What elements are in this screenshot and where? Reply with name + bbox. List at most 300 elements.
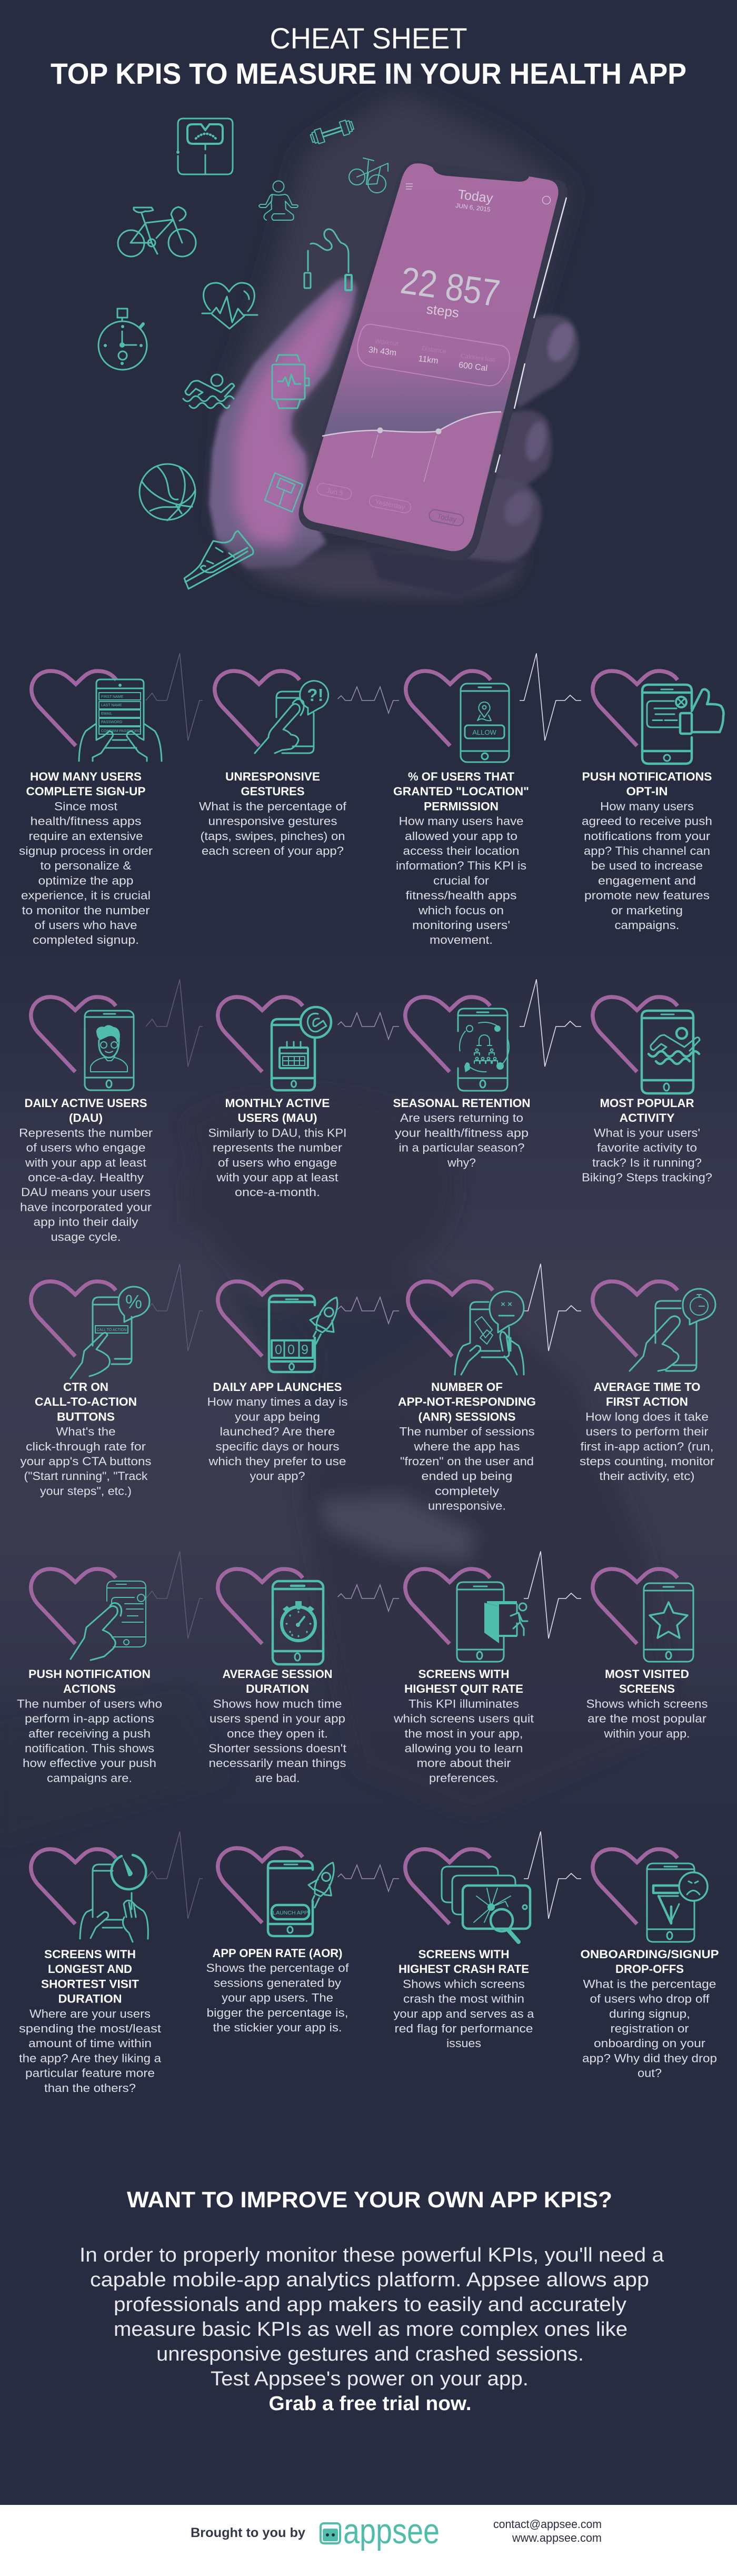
screen labels: Today (457, 187, 494, 206)
body text: your app's CTA buttons (20, 1455, 152, 1468)
body text: of users who engage (26, 1141, 145, 1154)
panel: average session duration: DURATION (246, 1682, 309, 1695)
ecg lines row 2 (146, 980, 581, 1067)
body text: allowing you to learn (404, 1742, 523, 1755)
icon: phone with rocket and counter: 0 (287, 1343, 295, 1357)
icon: signup form on tablet: EMAIL (101, 712, 112, 716)
body text: your health/fitness app (395, 1126, 529, 1139)
icon: phone with star (644, 1583, 693, 1662)
body text: Shows how much time (213, 1697, 342, 1710)
body text: crucial for (433, 874, 489, 887)
heading: PUSH NOTIFICATION (28, 1667, 151, 1681)
body text: What's the (56, 1425, 116, 1438)
body text (395, 1111, 529, 1169)
body text: require an extensive (28, 830, 143, 843)
heading: DAILY APP LAUNCHES (213, 1380, 342, 1394)
panel: ctr on call-to-action buttons: BUTTONS (57, 1410, 115, 1423)
ecg lines row 4 (146, 1552, 581, 1639)
icon: phone with rocket and counter (269, 1291, 348, 1372)
panel: unresponsive gestures: GESTURES (241, 785, 304, 798)
heart outline (31, 997, 116, 1072)
body text: experience, it is crucial (21, 889, 151, 902)
icon: heart pulse (202, 283, 257, 329)
icon: phone with rocket and counter: 0 (275, 1343, 282, 1357)
icon: frozen phone in hands (455, 1291, 524, 1375)
body text: which screens users quit (393, 1712, 534, 1725)
body text: (taps, swipes, pinches) on (200, 830, 345, 843)
brought to you by: Brought to you by (191, 2525, 305, 2540)
body text: once-a-day. Healthy (28, 1171, 144, 1184)
body text: track? Is it running? (592, 1156, 702, 1169)
body text: first in-app action? (run, (580, 1440, 714, 1453)
title: cheat sheet: CHEAT SHEET (270, 22, 467, 55)
body text (399, 1425, 535, 1513)
body text: which focus on (418, 904, 504, 917)
body text: be used to increase (591, 859, 703, 872)
chart area (303, 412, 503, 551)
body text: allowed your app to (405, 830, 517, 843)
panel: app-not-responding sessions: (ANR) SESSIONS (418, 1410, 516, 1423)
body text: after receiving a push (28, 1727, 151, 1740)
heading: SEASONAL RETENTION (393, 1097, 531, 1110)
heading: APP OPEN RATE (AOR) (213, 1947, 342, 1960)
body text (208, 1697, 346, 1784)
body text: are bad. (255, 1771, 300, 1784)
icon: frozen phone in hands: × × (501, 1300, 512, 1309)
body text: how effective your push (23, 1756, 156, 1770)
panel: app open rate (206, 1848, 349, 2034)
stats pill (357, 324, 510, 386)
body text: once-a-month. (235, 1186, 320, 1199)
heart outline (406, 671, 491, 746)
panel: push notification actions: ACTIONS (63, 1682, 116, 1695)
panel: average session duration (208, 1569, 346, 1784)
icon: signup form on tablet: LAST NAME (101, 704, 122, 707)
panel: screens with highest quit rate: HIGHEST QUIT RATE (404, 1682, 523, 1695)
panel: push notifications opt-in: OPT-IN (626, 785, 668, 798)
icon: phone with funnel and sad face (647, 1863, 708, 1942)
body text (396, 815, 526, 946)
body text: notification. This shows (25, 1742, 154, 1755)
icon: swimmer (183, 374, 234, 408)
body text: perform in-app actions (25, 1712, 154, 1725)
panel: location permission: GRANTED "LOCATION" (393, 785, 529, 798)
body text: campaigns. (615, 919, 679, 932)
panel: how many users complete sign-up: COMPLETE SIGN-UP (26, 785, 145, 798)
body text: completed signup. (33, 933, 139, 946)
call to action text: Test Appsee's power on your app. (211, 2368, 529, 2390)
body text: The number of sessions (399, 1425, 535, 1438)
icon: tap call to action: CALL TO ACTION (97, 1328, 126, 1332)
icon: phone with stopwatch (273, 1581, 323, 1664)
panel: monthly active users (208, 997, 346, 1199)
heart outline (218, 1281, 303, 1356)
heading: AVERAGE SESSION (222, 1667, 333, 1681)
panel: onboarding signup drop-offs: DROP-OFFS (615, 1962, 684, 1976)
contact details (493, 2518, 602, 2544)
body text: with your app at least (25, 1156, 146, 1169)
body text (19, 800, 153, 946)
body text (19, 1126, 153, 1243)
panel: daily active users: (DAU) (69, 1111, 103, 1124)
heading: MONTHLY ACTIVE (225, 1097, 330, 1110)
footer band (0, 2505, 737, 2576)
panel: screens with longest and shortest visit duration: DURATION (58, 1992, 122, 2006)
call to action heading: WANT TO IMPROVE YOUR OWN APP KPIS? (127, 2187, 612, 2213)
body text: their activity, etc) (599, 1469, 695, 1483)
body text: users spend in your app (210, 1712, 345, 1725)
body text: to personalize & (40, 859, 132, 872)
body text (19, 2007, 162, 2095)
icon: phone with exit door (457, 1582, 527, 1662)
heading: UNRESPONSIVE (225, 770, 320, 783)
panel: screens with highest crash rate: HIGHEST CRASH RATE (399, 1962, 529, 1976)
body text: crash the most within (403, 1992, 524, 2006)
panel: how many users complete sign-up (19, 671, 162, 946)
panel: average time to first action (580, 1281, 715, 1483)
body text: registration or (611, 2022, 689, 2035)
body text: during signup, (609, 2007, 690, 2020)
panel: push notification actions (17, 1569, 162, 1784)
screen labels: JUN 6, 2015 (455, 202, 491, 213)
body text: monitoring users' (412, 919, 510, 932)
body text: health/fitness apps (31, 815, 141, 828)
icon: large bicycle (118, 207, 196, 256)
panel: location permission: PERMISSION (424, 800, 499, 813)
body text: Shows which screens (586, 1697, 708, 1710)
icon: signup form on tablet (79, 679, 162, 761)
body text (208, 1126, 346, 1199)
icon: phone with allow button: ALLOW (472, 728, 496, 736)
panel: screens with longest and shortest visit duration: SHORTEST VISIT (41, 1977, 140, 1990)
panel: app-not-responding sessions (398, 1281, 536, 1513)
body text: agreed to receive push (582, 815, 712, 828)
body text: unresponsive. (428, 1499, 506, 1513)
icon: basketball (140, 464, 195, 520)
body text: or marketing (611, 904, 683, 917)
contact details: contact@appsee.com (493, 2518, 602, 2531)
heart outline (405, 1569, 490, 1644)
body text: represents the number (213, 1141, 342, 1154)
body text: users to perform their (585, 1425, 709, 1438)
heart outline (218, 997, 303, 1072)
body text: app? Why did they drop (582, 2051, 717, 2065)
body text: sessions generated by (214, 1976, 341, 1989)
heart outline (593, 1569, 678, 1644)
body text: What is your users' (594, 1126, 700, 1139)
hero: hand holding phone (209, 92, 579, 598)
panel: unresponsive gestures (199, 671, 347, 857)
panel: ctr on call-to-action buttons (20, 1281, 152, 1497)
body text: access their location (403, 844, 519, 857)
body text: the stickier your app is. (213, 2021, 342, 2034)
icon: phone with swimmer (642, 1011, 700, 1093)
body text: necessarily mean things (208, 1756, 346, 1770)
body text (582, 1977, 717, 2080)
panel: onboarding signup drop-offs (580, 1849, 719, 2080)
panel: push notifications opt-in (582, 671, 723, 932)
screen labels: 22 857 (398, 259, 502, 315)
body text: of users who drop off (590, 1992, 710, 2006)
icon: tap with question bubble: ?! (307, 685, 324, 705)
body text: are the most popular (587, 1712, 706, 1725)
body text (20, 1425, 152, 1497)
icon: dumbbell (310, 119, 355, 145)
body text: to monitor the number (22, 904, 150, 917)
appsee logo (321, 2511, 440, 2551)
body text: with your app at least (216, 1171, 338, 1184)
palm and thumb (209, 279, 357, 569)
body text: movement. (430, 933, 493, 946)
icon: phone with rocket and launch button: LAUNCH APP (273, 1910, 308, 1916)
body text (207, 1395, 347, 1483)
stats pill: 11km (418, 354, 439, 366)
heading: ONBOARDING/SIGNUP (580, 1948, 719, 1961)
icon: signup form on tablet: PASSWORD (101, 721, 122, 724)
stats pill: 600 Cal (458, 361, 488, 373)
icon: small bicycle (349, 158, 388, 193)
icon: signup form on tablet: FIRST NAME (101, 695, 124, 699)
body text: app? This channel can (584, 844, 710, 857)
body text: How many times a day is (207, 1395, 347, 1408)
body text: fitness/health apps (405, 889, 517, 902)
panel: location permission (393, 671, 529, 946)
icon: tap with question bubble (255, 681, 328, 753)
body text: ended up being (421, 1469, 513, 1483)
ecg lines row 3 (146, 1264, 581, 1351)
body text: red flag for performance (395, 2022, 533, 2035)
light beam behind phone (221, 92, 569, 527)
screen labels (398, 187, 502, 321)
appsee logo: appsee (343, 2511, 440, 2551)
body text: your app? (250, 1469, 305, 1483)
panel: app-not-responding sessions: APP-NOT-RESPONDING (398, 1395, 536, 1408)
call to action text: measure basic KPIs as well as more complex ones like (114, 2318, 628, 2341)
chart line and markers (322, 412, 501, 482)
body text: Are users returning to (400, 1111, 523, 1124)
icon: jump rope (304, 229, 352, 290)
heart outline (218, 1848, 303, 1923)
panel: screens with highest crash rate (394, 1849, 534, 2050)
body text: How many users (600, 800, 694, 813)
heading: HOW MANY USERS (30, 770, 142, 783)
heart outline (408, 1281, 493, 1356)
fingers (368, 315, 579, 596)
body text: "frozen" on the user and (400, 1455, 534, 1468)
body text: engagement and (598, 874, 696, 887)
heading: MOST POPULAR (600, 1097, 694, 1110)
icon: phone with rocket and counter: 9 (301, 1343, 308, 1357)
icon: smart watch (272, 355, 309, 408)
heading: DAILY ACTIVE USERS (24, 1097, 147, 1110)
body text: unresponsive gestures (208, 815, 337, 828)
body text: What is the percentage (583, 1977, 716, 1990)
body text: Since most (54, 800, 117, 813)
heart outline (218, 1569, 303, 1644)
body text: signup process in order (19, 844, 153, 857)
body text: of users who have (35, 919, 137, 932)
body text: onboarding on your (594, 2037, 705, 2050)
body text (206, 1961, 349, 2034)
body text: promote new features (584, 889, 710, 902)
body text: completely (435, 1484, 499, 1497)
body text: What is the percentage of (199, 800, 347, 813)
heart outline (31, 1569, 116, 1644)
date buttons: Today (436, 512, 457, 524)
panel: daily app launches (207, 1281, 348, 1483)
heart outline (593, 671, 678, 746)
panel: monthly active users: USERS (MAU) (238, 1111, 317, 1124)
heart outline (405, 997, 490, 1072)
body text: This KPI illuminates (409, 1697, 519, 1710)
panel: average time to first action: FIRST ACTION (606, 1395, 688, 1408)
body text: issues (446, 2037, 481, 2050)
icon: running shoe (184, 531, 253, 589)
panel: screens with highest quit rate (393, 1569, 534, 1784)
body text: your app users. The (222, 1991, 333, 2005)
icon: cracked screens with magnifier (442, 1867, 530, 1942)
hero fitness icons (98, 119, 388, 589)
body text: once they open it. (227, 1727, 328, 1740)
icon: weighing scale (177, 119, 233, 174)
stats pill: Distance (421, 344, 447, 355)
body text (199, 800, 347, 857)
date buttons (316, 482, 464, 527)
body text: where the app has (413, 1440, 520, 1453)
icon: stopwatch (98, 309, 147, 370)
body text: in a particular season? (399, 1141, 524, 1154)
body text: specific days or hours (216, 1440, 339, 1453)
body text: steps counting, monitor (580, 1455, 714, 1468)
panel: seasonal retention (393, 997, 531, 1169)
icon: phone with thumbs up (642, 685, 723, 764)
body text: the app? Are they liking a (19, 2051, 162, 2065)
body text: than the others? (44, 2081, 136, 2095)
body text (582, 1126, 712, 1184)
body text: Similarly to DAU, this KPI (208, 1126, 346, 1139)
body text (582, 800, 712, 932)
icon: phone with allow button (461, 684, 509, 762)
body text: usage cycle. (51, 1230, 121, 1243)
heading: MOST VISITED (605, 1667, 689, 1681)
body text: of users who engage (218, 1156, 337, 1169)
heart outline (405, 1849, 490, 1924)
body text: Where are your users (29, 2007, 151, 2020)
body text: Represents the number (19, 1126, 153, 1139)
body text: your app being (235, 1410, 320, 1423)
heading: PUSH NOTIFICATIONS (582, 770, 712, 783)
heart outline (593, 1281, 678, 1356)
icon: signup form on tablet: CONFIRM PASSWORD (101, 729, 141, 733)
icon: phone with user portrait (85, 1011, 134, 1090)
icon: phone with seasons and magnet (458, 1009, 509, 1091)
icon: tap with stopwatch bubble (630, 1289, 715, 1371)
body text: bigger the percentage is, (206, 2006, 348, 2019)
phone screen (303, 163, 559, 551)
icon: hands with gauge (80, 1855, 148, 1942)
body text: How long does it take (585, 1410, 709, 1423)
body text: ("Start running", "Track (24, 1469, 148, 1483)
date buttons: Yesterday (374, 498, 406, 511)
body text: within your app. (603, 1727, 690, 1740)
icon: tap call to action (71, 1287, 150, 1378)
stats pill: 3h 43m (368, 346, 397, 358)
call to action text: professionals and app makers to easily and accurately (114, 2294, 626, 2316)
hand shadow under phone (232, 548, 526, 598)
body text: Biking? Steps tracking? (582, 1171, 712, 1184)
body text: your app and serves as a (394, 2007, 534, 2020)
body text: particular feature more (25, 2067, 155, 2080)
ecg lines row 1 (146, 653, 581, 741)
heart outline (32, 671, 116, 746)
panel: screens with longest and shortest visit duration: LONGEST AND (48, 1962, 132, 1976)
icon: meditation (259, 181, 298, 220)
ecg lines row 5 (146, 1832, 581, 1919)
icon: tap call to action: % (125, 1291, 142, 1312)
heart outline (593, 1849, 678, 1924)
body text: which they prefer to use (208, 1455, 346, 1468)
body text: campaigns are. (47, 1771, 132, 1784)
panel: most popular activity (582, 997, 712, 1184)
body text: information? This KPI is (396, 859, 526, 872)
body text: click-through rate for (26, 1440, 146, 1453)
call to action text: unresponsive gestures and crashed sessions. (156, 2343, 584, 2365)
body text: out? (638, 2067, 662, 2080)
body text: notifications from your (584, 830, 710, 843)
date buttons: Jun 5 (326, 486, 344, 497)
icon: phone with rocket and launch button (268, 1857, 344, 1936)
body text: Shows the percentage of (206, 1961, 349, 1975)
body text (393, 1697, 534, 1784)
heading: SCREENS WITH (44, 1948, 136, 1961)
heart outline (31, 1849, 116, 1924)
body text: spending the most/least (19, 2022, 161, 2035)
background photo: runner silhouette (0, 922, 737, 1922)
screen labels: steps (425, 301, 460, 321)
body text: The number of users who (17, 1697, 162, 1710)
panel: most popular activity: ACTIVITY (619, 1111, 675, 1124)
body text: more about their (417, 1756, 511, 1770)
icon: small scale on palm (265, 473, 303, 512)
call to action text: Grab a free trial now. (268, 2393, 472, 2415)
body text (17, 1697, 162, 1784)
body text (580, 1410, 714, 1483)
phone body (299, 161, 567, 561)
heart outline (215, 671, 300, 746)
heading: AVERAGE TIME TO (594, 1380, 700, 1394)
phone edge highlights (495, 198, 566, 472)
heading: SCREENS WITH (418, 1667, 510, 1681)
panel: ctr on call-to-action buttons: CALL-TO-ACTION (35, 1395, 137, 1408)
panel: screens with longest and shortest visit duration (19, 1849, 162, 2095)
body text: the most in your app, (404, 1727, 523, 1740)
body text: Shorter sessions doesn't (208, 1742, 346, 1755)
body text: preferences. (429, 1771, 499, 1784)
icon: phone with calendar and magnet (272, 1007, 331, 1090)
contact details: www.appsee.com (512, 2531, 602, 2544)
body text: amount of time within (28, 2037, 152, 2050)
icon: tap on notification (71, 1581, 146, 1660)
body text: launched? Are there (220, 1425, 335, 1438)
stats pill: Workout (375, 337, 399, 348)
heart outline (31, 1281, 116, 1356)
body text: why? (447, 1156, 476, 1169)
body text: optimize the app (38, 874, 134, 887)
heart outline (593, 997, 678, 1072)
call to action text: capable mobile-app analytics platform. Appsee allows app (90, 2269, 649, 2291)
stats pill: Calories lost (460, 352, 496, 363)
panel: daily active users (19, 997, 153, 1243)
